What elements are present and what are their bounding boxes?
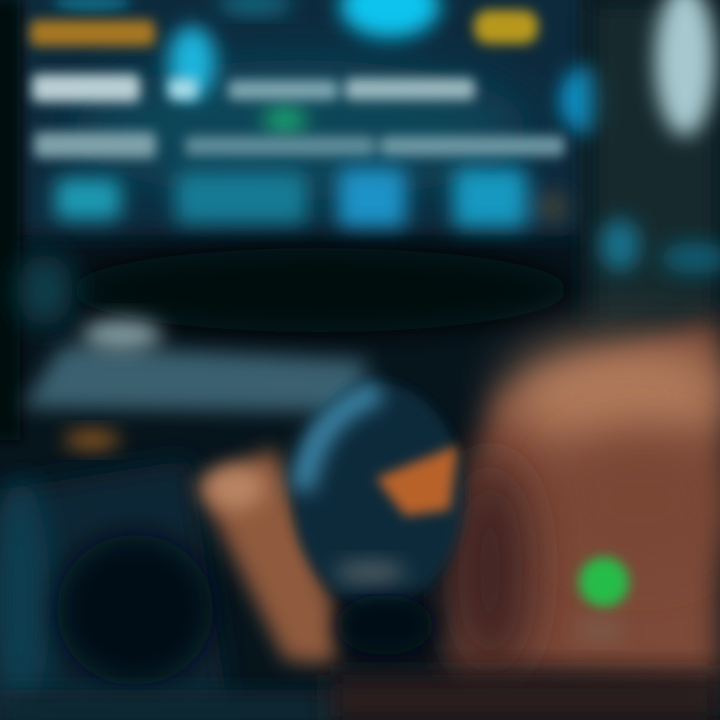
orange label bbox=[30, 20, 155, 46]
smartwatch bbox=[293, 383, 463, 655]
hand bbox=[330, 318, 720, 720]
heading line one bbox=[32, 74, 475, 102]
desk surface bbox=[22, 319, 370, 450]
lower-left sleeve bbox=[0, 460, 340, 720]
right side background bbox=[590, 0, 720, 320]
forearm bbox=[197, 448, 335, 665]
yellow label bbox=[474, 10, 538, 44]
cyan glow spots bbox=[52, 0, 613, 134]
watch face orange arrow bbox=[376, 445, 458, 516]
green dot bbox=[576, 557, 629, 640]
dark band and teal spot bbox=[17, 248, 570, 332]
heading line two bbox=[34, 132, 565, 158]
background screen panel bbox=[0, 0, 613, 440]
row of screen cards bbox=[55, 168, 568, 228]
